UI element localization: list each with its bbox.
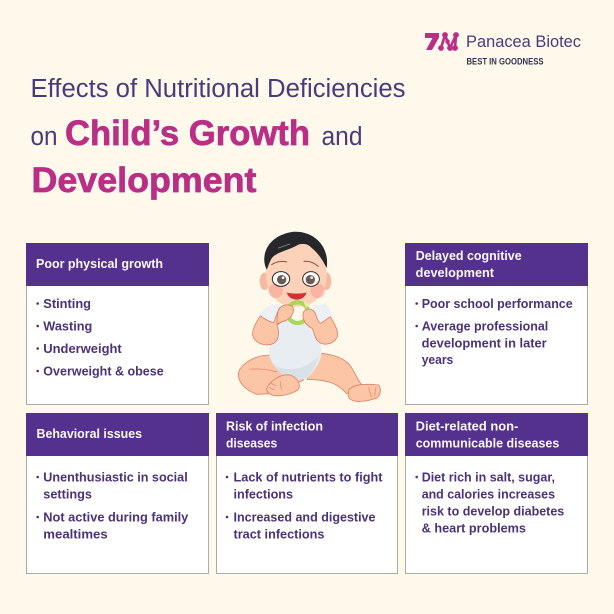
heading — [226, 420, 323, 450]
list: and calories increases — [422, 488, 555, 502]
baby head — [260, 232, 331, 307]
panel header — [405, 413, 588, 456]
heading: diseases — [226, 436, 277, 450]
list: development in later — [422, 336, 547, 350]
logo tagline: BEST IN GOODNESS — [466, 56, 544, 66]
title highlight: Development: Development — [32, 161, 257, 200]
list — [226, 470, 383, 542]
list: Lack of nutrients to fight — [234, 470, 383, 484]
list: tract infections — [234, 528, 325, 542]
heading: Diet-related non- — [416, 420, 518, 434]
logo name: Panacea Biotec — [466, 33, 581, 51]
right leg — [307, 353, 363, 394]
face — [266, 241, 327, 307]
bodysuit — [269, 320, 322, 380]
right eye — [303, 272, 319, 286]
title — [30, 75, 406, 200]
icon: logo mark — [425, 32, 459, 51]
list: Increased and digestive — [234, 510, 376, 524]
list: mealtimes — [43, 528, 108, 542]
list — [36, 470, 188, 542]
panel: delayed cognitive development — [405, 243, 588, 404]
panel: behavioral issues — [26, 413, 209, 574]
list: infections — [234, 488, 293, 502]
eyebrows — [272, 261, 318, 266]
panel header — [26, 413, 209, 456]
list: Average professional — [422, 320, 548, 334]
list: Diet rich in salt, sugar, — [422, 470, 555, 484]
panel header — [26, 243, 209, 286]
list: settings — [43, 488, 92, 502]
left foot — [267, 375, 299, 396]
list: Wasting — [43, 320, 92, 334]
heading — [416, 249, 522, 280]
heading: Poor physical growth — [36, 257, 163, 271]
hands and right arm — [277, 305, 338, 344]
title highlight: Child's Growth: Child’s Growth — [65, 114, 310, 153]
list — [415, 297, 573, 367]
list — [415, 470, 564, 536]
list: years — [422, 353, 453, 367]
title line 1: Effects of Nutritional Deficiencies — [30, 75, 406, 103]
hair — [264, 232, 327, 270]
title line 2 end: and — [322, 123, 362, 151]
list — [36, 297, 164, 378]
mouth — [287, 293, 307, 300]
panel: diet-related non-communicable diseases — [405, 413, 588, 574]
list: Poor school performance — [422, 297, 573, 311]
left eye — [272, 272, 290, 286]
ears — [260, 273, 270, 290]
heading — [416, 420, 559, 450]
title line 2 lead: on — [30, 123, 58, 151]
list: Unenthusiastic in social — [43, 470, 188, 484]
cheeks — [268, 283, 283, 298]
list: & heart problems — [422, 522, 526, 536]
right foot — [349, 384, 380, 401]
heading: Delayed cognitive — [416, 249, 522, 263]
list: Stinting — [43, 297, 91, 311]
panel header — [405, 243, 588, 286]
sleeves — [259, 304, 287, 324]
list: risk to develop diabetes — [422, 504, 564, 518]
list: Not active during family — [43, 510, 188, 524]
illustration: baby with teething ring — [238, 232, 380, 401]
logo: Panacea Biotec — [425, 32, 581, 66]
teething ring — [287, 302, 310, 323]
heading: development — [416, 266, 495, 280]
list: Underweight — [43, 342, 123, 356]
heading: Behavioral issues — [36, 427, 142, 441]
baby body — [238, 304, 380, 401]
heading: communicable diseases — [416, 436, 559, 450]
left arm — [253, 305, 293, 345]
panel header — [216, 413, 398, 456]
heading: Risk of infection — [226, 420, 323, 434]
panel: risk of infection diseases — [216, 413, 398, 574]
left leg — [238, 355, 304, 394]
list: Overweight & obese — [43, 364, 164, 378]
panel: poor physical growth — [26, 243, 209, 404]
